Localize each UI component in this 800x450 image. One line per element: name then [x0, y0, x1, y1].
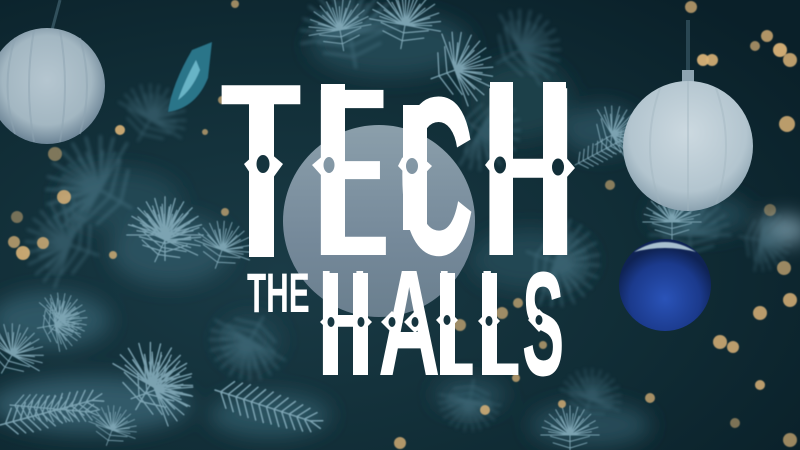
word: HALLS — [320, 271, 562, 376]
ornament: right white bauble — [623, 20, 753, 211]
word: TECH: E — [311, 39, 391, 307]
title: Tech the Halls lettering — [222, 82, 575, 376]
ornament: large central translucent bauble — [283, 125, 475, 317]
word: TECH: C — [398, 52, 474, 303]
word: HALLS: S — [522, 242, 564, 408]
word: HALLS: L — [435, 240, 475, 408]
word: THE: THE — [247, 261, 310, 324]
ornament: top-left striped bauble — [0, 0, 105, 144]
word: TECH: T — [218, 31, 304, 310]
ornament: blue bauble with snow — [619, 239, 711, 331]
word: TECH — [222, 82, 575, 257]
word: HALLS: L — [477, 238, 521, 408]
word: HALLS: A — [378, 240, 440, 408]
word: TECH: H — [478, 35, 579, 307]
word: HALLS: H — [317, 240, 369, 408]
ornament: small teal glass drop — [168, 42, 212, 112]
